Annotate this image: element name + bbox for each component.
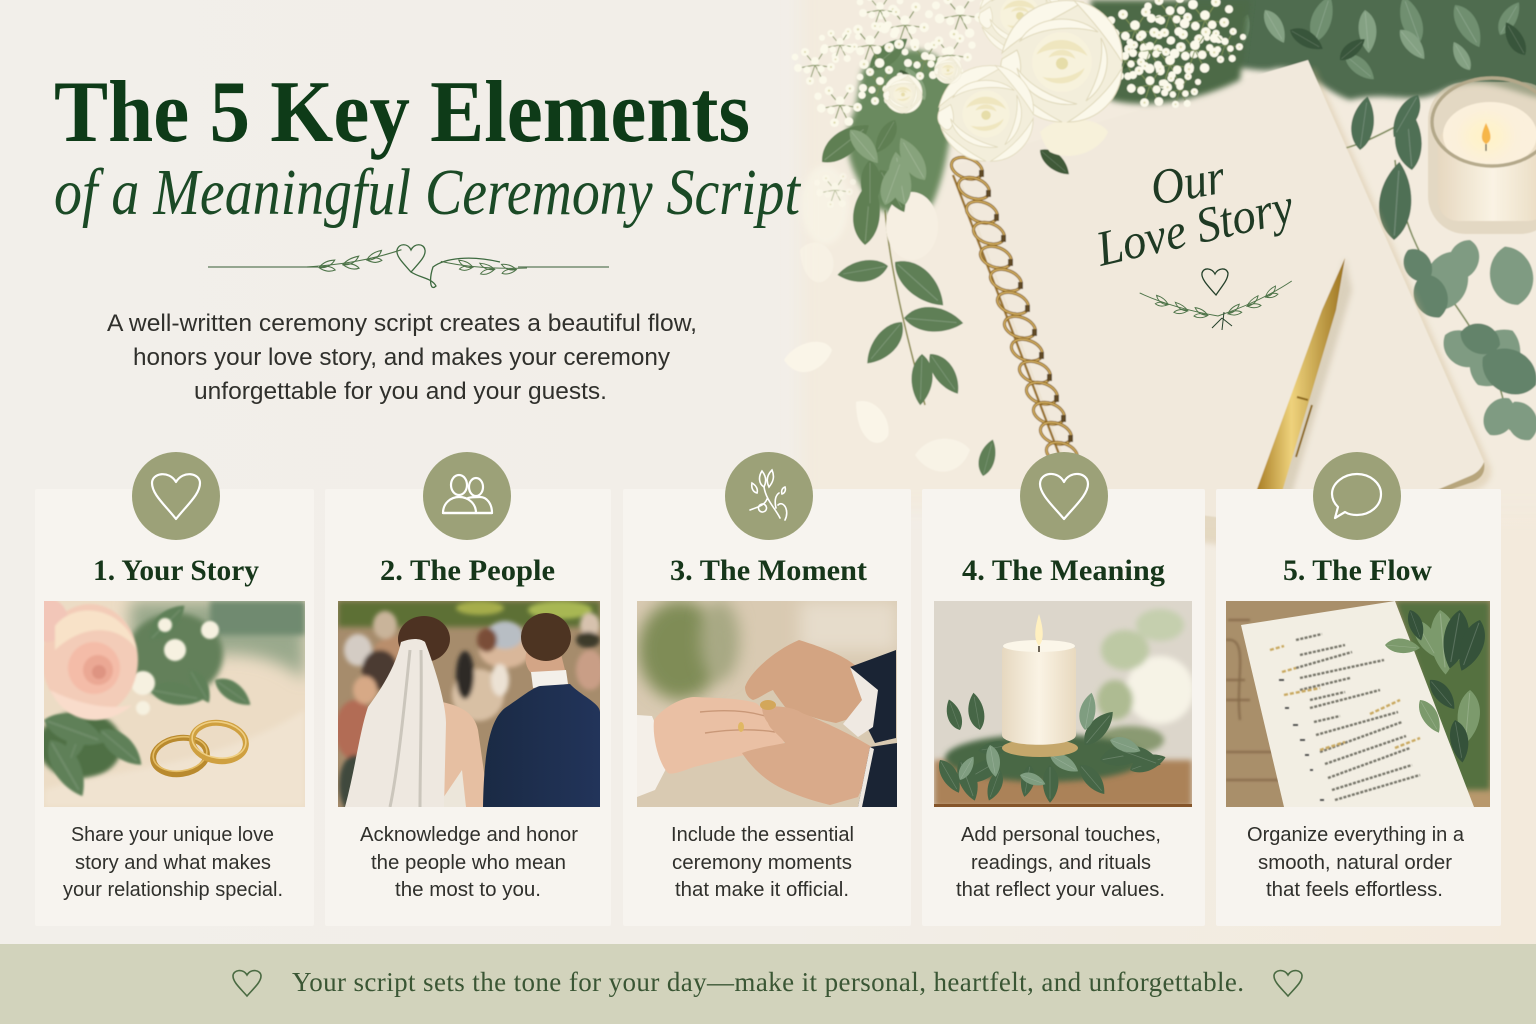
description: Organize everything in a [1247,824,1465,846]
panel: 4. The Meaning [922,452,1205,926]
description [63,824,283,901]
title: The 5 Key Elements [54,64,750,161]
intro text: A well-written ceremony script creates a beautiful flow, [107,310,697,337]
white flower bouquet [792,0,1250,260]
description: the people who mean [371,852,566,874]
intro text: honors your love story, and makes your ceremony [133,344,670,371]
right eucalyptus sprigs [1308,90,1536,445]
photo: bride and groom [338,601,600,807]
glass candle [1428,78,1536,234]
notebook [955,60,1491,554]
heading: 5. The Flow [1283,554,1432,587]
footer banner [0,944,1536,1024]
panel: 1. Your Story [24,452,314,926]
heading: 3. The Moment [670,554,867,587]
description: that make it official. [675,879,849,901]
scattered petals [784,243,970,472]
footer message: Your script sets the tone for your day—make it personal, heartfelt, and unforgettable. [292,967,1244,997]
intro text [107,310,697,405]
left eucalyptus sprig [836,210,1000,478]
photo: ceremony script page [1226,601,1490,807]
description [360,824,578,901]
description: that feels effortless. [1266,879,1443,901]
description: Share your unique love [71,824,274,846]
dark foliage backdrop [1190,0,1536,100]
icon: heart badge [132,452,220,540]
description [1247,824,1465,901]
description: the most to you. [395,879,541,901]
heading: 1. Your Story [93,554,259,587]
icon: right heart [1274,971,1302,996]
notebook heading: Our [1146,148,1229,216]
description: Acknowledge and honor [360,824,578,846]
description [671,824,854,901]
description: Add personal touches, [961,824,1161,846]
subtitle: of a Meaningful Ceremony Script [54,156,801,229]
description: Include the essential [671,824,854,846]
description: story and what makes [75,852,271,874]
description [956,824,1165,901]
panel: 3. The Moment [623,452,911,926]
photo: ring exchange [637,601,897,807]
icon: floral sprig badge [725,452,813,540]
photo: candle and greenery [934,601,1192,807]
panel: 2. The People [325,452,611,926]
description: that reflect your values. [956,879,1165,901]
heading: 2. The People [380,554,555,587]
description: your relationship special. [63,879,283,901]
icon: speech bubble badge [1313,452,1401,540]
icon: people badge [423,452,511,540]
panel: 5. The Flow [1216,452,1501,926]
photo: rose and wedding rings [44,601,305,807]
spiral binding [948,153,1080,468]
description: smooth, natural order [1258,852,1452,874]
description: ceremony moments [672,852,852,874]
intro text: unforgettable for you and your guests. [194,378,607,405]
notebook heart and sprigs [1137,269,1296,330]
notebook heading: Love Story [1090,177,1299,277]
description: readings, and rituals [971,852,1151,874]
heading: 4. The Meaning [962,554,1165,587]
cream table surface [800,0,1536,510]
title divider with heart and sprigs [208,245,609,288]
floral notebook scene [784,0,1536,554]
gold pen [1256,258,1352,500]
icon: heart badge [1020,452,1108,540]
icon: left heart [233,971,261,996]
